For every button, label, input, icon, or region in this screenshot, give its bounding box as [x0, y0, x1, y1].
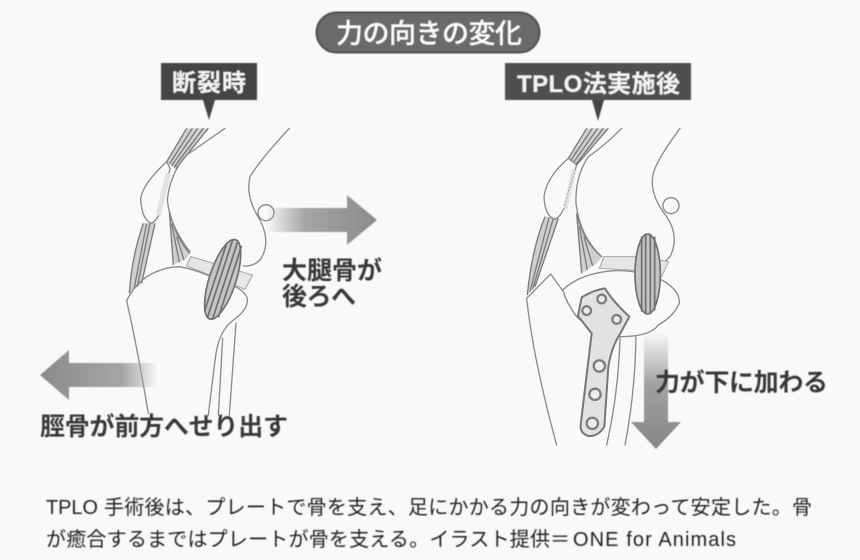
label: at rupture: 断裂時: [172, 70, 246, 97]
arrow: femur backward: [266, 195, 377, 245]
knee illustration: after TPLO: [527, 128, 680, 445]
femur marker: [258, 205, 274, 221]
label: tibia forward: 脛骨が前方へせり出す: [40, 412, 288, 441]
arrow: tibia forward: [40, 350, 158, 400]
title pill: [316, 12, 540, 52]
label: downward force: 力が下に加わる: [655, 368, 828, 397]
knee illustration: at rupture: [127, 128, 289, 415]
caption: TPLO: [46, 497, 98, 519]
caption: ONE for Animals: [573, 529, 736, 551]
tibia: [527, 274, 563, 445]
caption: ＝: [550, 529, 570, 551]
arrow: downward force: [631, 332, 681, 449]
label: at rupture: [161, 63, 257, 120]
femur marker: [663, 198, 679, 214]
label: femur backward: 大腿骨が: [282, 256, 382, 285]
label: femur backward: 後ろへ: [282, 283, 356, 311]
bone plate: [578, 288, 629, 436]
caption: 手術後は、プレートで骨を支え、足にかかる力の向きが変わって安定した。骨: [104, 496, 812, 519]
label: after TPLO: [505, 63, 691, 121]
panel: after TPLO: [505, 63, 828, 449]
label: after TPLO: TPLO法実施後: [517, 71, 680, 98]
title pill: 力の向きの変化: [336, 19, 522, 49]
caption: [46, 496, 812, 551]
panel: at rupture: [40, 63, 382, 441]
caption: が癒合するまではプレートが骨を支える。イラスト提供: [46, 528, 550, 551]
